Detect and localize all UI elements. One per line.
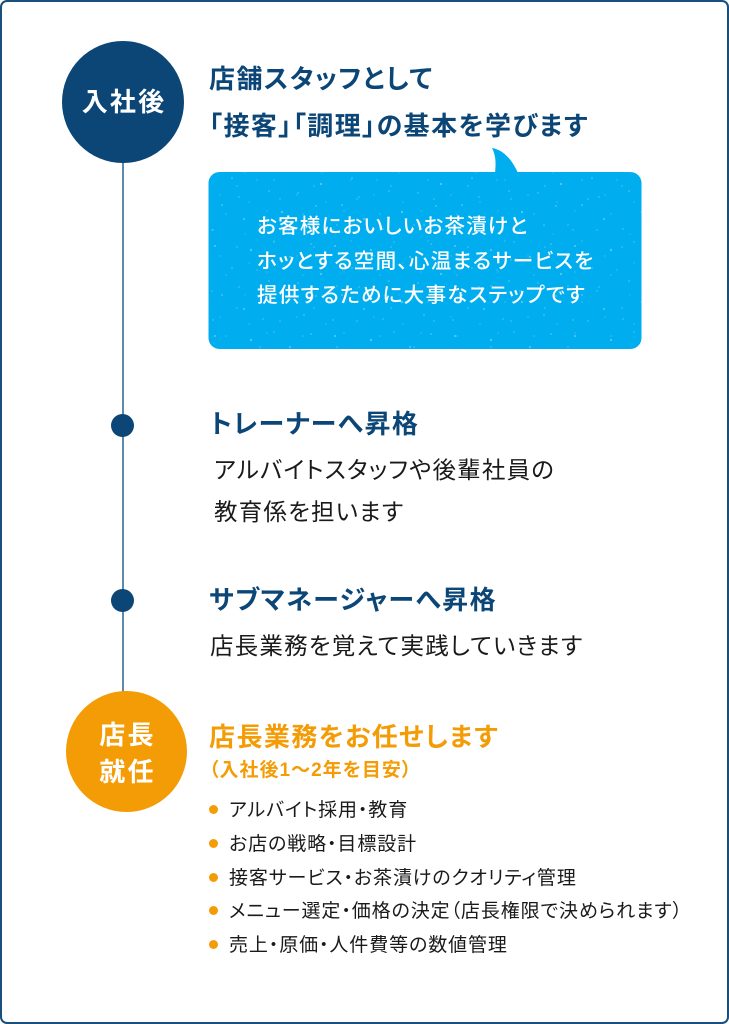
task list	[209, 800, 683, 956]
list item 1: アルバイト採用・教育	[229, 800, 408, 821]
heading: トレーナーへ昇格: トレーナーへ昇格	[210, 409, 419, 439]
bullet	[209, 873, 218, 882]
badge label: 就任	[99, 757, 156, 787]
speech bubble	[208, 148, 642, 349]
heading: 店長業務をお任せします: 店長業務をお任せします	[209, 722, 499, 752]
heading: 接客・調理の基本: 「接客」「調理」の基本を学びます	[209, 111, 589, 141]
bullet	[209, 839, 218, 848]
bullet	[209, 940, 218, 949]
list item 2: お店の戦略・目標設計	[229, 834, 417, 855]
bubble text line 3: 提供するために大事なステップです	[257, 284, 586, 307]
sub heading: 目安: （入社後1〜2年を目安）	[209, 760, 412, 781]
step badge: 店長就任	[66, 691, 187, 812]
timeline dot: trainer	[111, 414, 134, 437]
bubble text line 1: お客様においしいお茶漬けと	[257, 215, 529, 238]
badge label: 店長	[99, 720, 156, 750]
trainer text line 2: 教育係を担います	[214, 499, 404, 525]
badge label: 入社後	[82, 87, 166, 117]
heading: 店舗スタッフとして: 店舗スタッフとして	[209, 64, 433, 94]
list item 5: 売上・原価・人件費等の数値管理	[229, 935, 508, 956]
sub manager text: 店長業務を覚えて実践していきます	[210, 633, 584, 659]
bullet	[209, 906, 218, 915]
trainer text line 1: アルバイトスタッフや後輩社員の	[214, 457, 555, 483]
step badge: 入社後	[62, 41, 184, 163]
list item 3: 接客サービス・お茶漬けのクオリティ管理	[229, 868, 577, 889]
timeline line	[122, 155, 124, 700]
bubble text line 2: ホッとする空間、心温まるサービスを	[257, 250, 594, 273]
bullet	[209, 805, 218, 814]
heading: サブマネージャーへ昇格: サブマネージャーへ昇格	[209, 585, 497, 615]
list item 4: メニュー選定・価格の決定（店長権限で決められます）	[229, 901, 683, 922]
timeline dot: sub manager	[111, 589, 134, 612]
badge label	[99, 720, 156, 787]
